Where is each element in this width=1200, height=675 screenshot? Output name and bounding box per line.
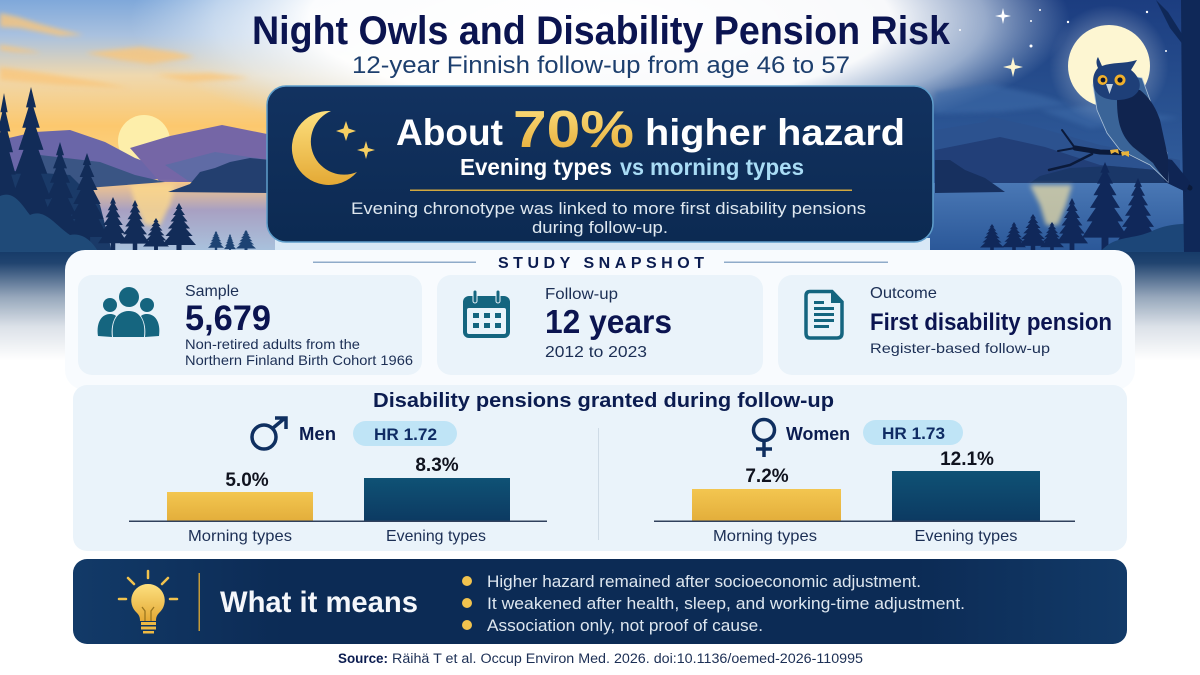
owl [1093, 57, 1190, 192]
key points: It weakened after health, sleep, and working-time adjustment. [487, 595, 965, 613]
sun reflection [130, 184, 175, 225]
panel: headline finding [267, 86, 933, 242]
key points: Higher hazard remained after socioeconomic adjustment. [487, 573, 921, 591]
right far shore [1030, 166, 1180, 184]
chart heading: Disability pensions granted during follow-up [373, 390, 834, 412]
follow-up text: 12 years [545, 303, 672, 340]
moon [1049, 5, 1169, 125]
follow-up text: 2012 to 2023 [545, 344, 647, 361]
card: outcome [778, 275, 1122, 375]
owl beak [1106, 84, 1113, 94]
left lake [85, 182, 275, 252]
sun [118, 115, 170, 167]
owl wing [1117, 90, 1168, 182]
panel: what it means [73, 559, 1127, 644]
source line: Source: [338, 651, 388, 666]
follow-up text [545, 286, 672, 361]
bar: men evening types: 8.3% [415, 455, 459, 476]
headline: about 70% higher hazard: higher hazard [645, 112, 905, 153]
outcome text [870, 285, 1112, 356]
night sky [600, 0, 1200, 252]
heading: what it means: What it means [220, 586, 418, 619]
owl talons [1110, 149, 1129, 157]
description: Evening chronotype was linked to more first disability pensions [351, 199, 866, 218]
owl head [1093, 57, 1140, 100]
key points [462, 573, 965, 635]
left island [168, 158, 270, 193]
stars [959, 8, 1167, 77]
bar: men morning types: 5.0% [225, 470, 269, 491]
panel: study snapshot [65, 250, 1135, 390]
headline: about 70% higher hazard: About [396, 112, 503, 153]
moon reflection [1030, 185, 1072, 225]
sunset clouds [0, 13, 250, 88]
bar: women morning types: 7.2% [745, 466, 789, 487]
outcome text: Register-based follow-up [870, 340, 1050, 356]
sunset sky [0, 0, 600, 252]
icon: people [98, 287, 159, 337]
source line: Räihä T et al. Occup Environ Med. 2026. doi:10.1136/oemed-2026-110995 [392, 651, 863, 666]
comparison line [460, 154, 804, 180]
sample text: Sample [185, 283, 239, 300]
subtitle: 12-year Finnish follow-up from age 46 to 57 [352, 52, 850, 79]
bar: men morning types [167, 470, 313, 545]
comparison line: Evening types [460, 154, 612, 180]
outcome text: Outcome [870, 285, 937, 302]
right foliage [1100, 222, 1200, 252]
icon: calendar [463, 290, 510, 338]
key points: Association only, not proof of cause. [487, 617, 763, 635]
icon: crescent moon and stars [292, 111, 375, 185]
owl tail [1150, 155, 1190, 192]
heading: study snapshot: STUDY SNAPSHOT [498, 255, 704, 272]
bar: women morning types [692, 466, 841, 545]
pill: hazard ratio men: HR 1.72 [374, 425, 437, 444]
card: follow-up [437, 275, 763, 375]
owl body [1093, 70, 1168, 182]
distant shore [40, 155, 165, 190]
sample text: Non-retired adults from the [185, 336, 360, 352]
left mountains [0, 125, 270, 185]
right lake [930, 183, 1200, 252]
tree trunk [1181, 0, 1200, 252]
icon: male symbol [252, 418, 286, 449]
right island [935, 160, 1005, 193]
bar: women morning types: Morning types [713, 528, 817, 545]
pill: hazard ratio men [353, 421, 457, 446]
icon: document [806, 292, 842, 338]
chart: women [654, 420, 1075, 545]
strip under headline panel [275, 238, 930, 252]
comparison line: morning types [650, 154, 804, 180]
bar: women evening types [892, 449, 1040, 545]
title: Night Owls and Disability Pension Risk [252, 9, 951, 53]
description [351, 199, 866, 237]
label: men: Men [299, 424, 336, 444]
panel: disability pensions chart [73, 385, 1127, 551]
right mountains [935, 117, 1180, 185]
bar: men evening types: Evening types [386, 528, 486, 545]
sample text: Northern Finland Birth Cohort 1966 [185, 352, 413, 368]
follow-up text: Follow-up [545, 286, 618, 303]
label: women: Women [786, 424, 850, 444]
sample text: 5,679 [185, 299, 271, 338]
bar: women evening types: Evening types [914, 528, 1018, 545]
bar: women evening types: 12.1% [940, 449, 994, 470]
icon: female symbol [754, 420, 774, 457]
right trees [980, 162, 1158, 252]
description: during follow-up. [532, 218, 668, 237]
bar: men morning types: Morning types [188, 528, 292, 545]
headline: about 70% higher hazard: 70% [513, 101, 634, 159]
card: sample [78, 275, 422, 375]
pill: hazard ratio women: HR 1.73 [882, 424, 945, 443]
branch [1049, 130, 1190, 188]
owl eyes [1098, 75, 1108, 85]
pale centre sky [100, 0, 1100, 180]
comparison line: vs [620, 154, 644, 180]
bar: men evening types [364, 455, 510, 545]
icon: light bulb [119, 571, 177, 634]
pill: hazard ratio women [863, 420, 963, 445]
left ground [0, 170, 112, 252]
right clouds [935, 84, 1180, 128]
chart: men [129, 418, 547, 545]
left foliage [0, 195, 100, 350]
left trees [0, 87, 196, 257]
outcome text: First disability pension [870, 309, 1112, 336]
sample text [185, 283, 413, 368]
fade to white [0, 250, 1200, 380]
headline: about 70% higher hazard [396, 101, 905, 159]
